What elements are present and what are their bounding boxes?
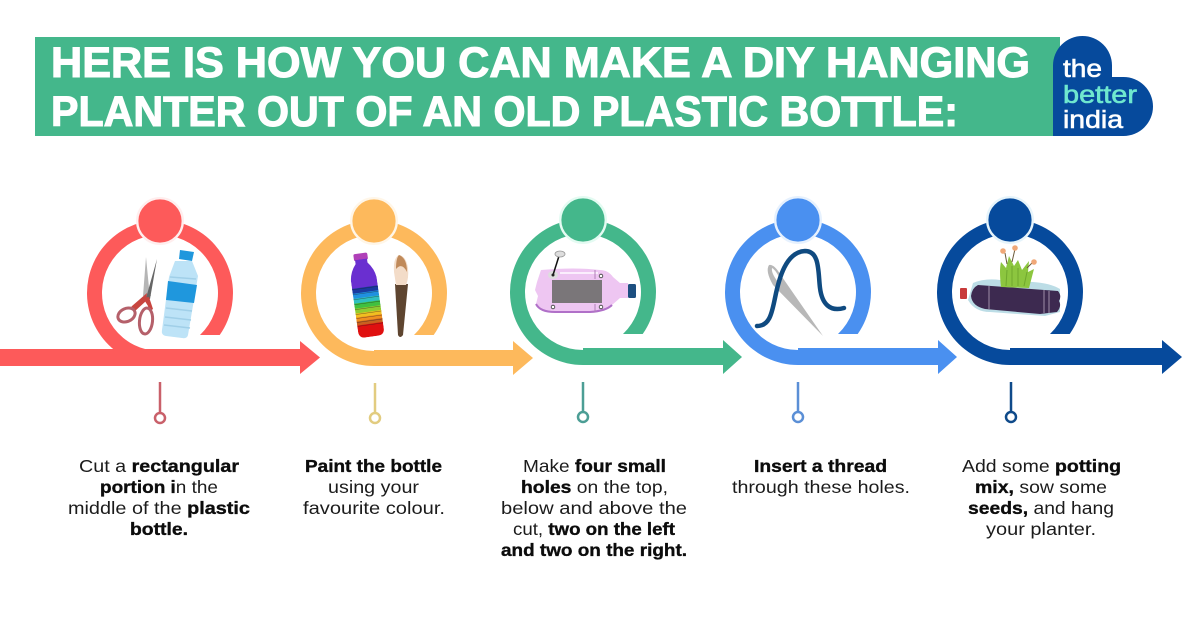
text: step 2 [303, 456, 445, 518]
text: step 4: Insert a thread [754, 456, 887, 476]
logo: the better india: the [1063, 55, 1102, 83]
step 1: red ring and arrow [0, 198, 320, 374]
text: step 2: Paint the bottle [305, 456, 442, 476]
connector 4 [793, 382, 803, 422]
connector 3 [578, 382, 588, 422]
step 2: yellow ring and arrow [301, 198, 533, 375]
text: step 3: below and above the [501, 498, 687, 518]
text: step 5: Add some potting [962, 456, 1121, 476]
title: HERE IS HOW YOU CAN MAKE A DIY HANGING [51, 39, 1030, 87]
title [51, 39, 1030, 136]
text: step 4: through these holes. [732, 477, 910, 497]
text: step 3: cut, two on the left [513, 519, 675, 539]
step 4: blue ring and arrow [725, 197, 957, 374]
text: step 3: holes on the top, [521, 477, 668, 497]
text: step 1: Cut a rectangular [79, 456, 239, 476]
text: step 1: portion i n the [100, 477, 218, 497]
text: step 5: your planter. [986, 519, 1096, 539]
text: step 5 [962, 456, 1121, 539]
text: step 1: bottle. [130, 519, 188, 539]
icon: paint brush [394, 255, 408, 337]
text: step 3: and two on the right. [501, 540, 687, 560]
connector 2 [370, 383, 380, 423]
text: step 2: using your [328, 477, 419, 497]
connector 5 [1006, 382, 1016, 422]
text: step 3: Make four small [523, 456, 666, 476]
text: step 4 [732, 456, 910, 497]
step 3: green ring and arrow [510, 197, 742, 374]
header banner [35, 37, 1060, 136]
icon: cut bottle with holes [535, 251, 636, 312]
logo: the better india: india [1063, 106, 1123, 134]
title: PLANTER OUT OF AN OLD PLASTIC BOTTLE: [51, 88, 958, 136]
text: step 1: middle of the plastic [68, 498, 250, 518]
text: step 3 [501, 456, 687, 560]
text: step 5: mix, sow some [975, 477, 1107, 497]
text: step 5: seeds, and hang [968, 498, 1114, 518]
text: step 1 [68, 456, 250, 539]
logo: the better india [1053, 36, 1153, 136]
step 5: navy ring and arrow [937, 197, 1182, 374]
icon: needle and thread [757, 251, 844, 336]
connector 1 [155, 382, 165, 423]
text: step 2: favourite colour. [303, 498, 445, 518]
icon: water bottle [162, 250, 198, 338]
icon: painted bottle [350, 252, 384, 338]
logo: the better india: better [1063, 81, 1137, 109]
icon: scissors [116, 257, 157, 335]
icon: planter with grass [960, 245, 1060, 316]
